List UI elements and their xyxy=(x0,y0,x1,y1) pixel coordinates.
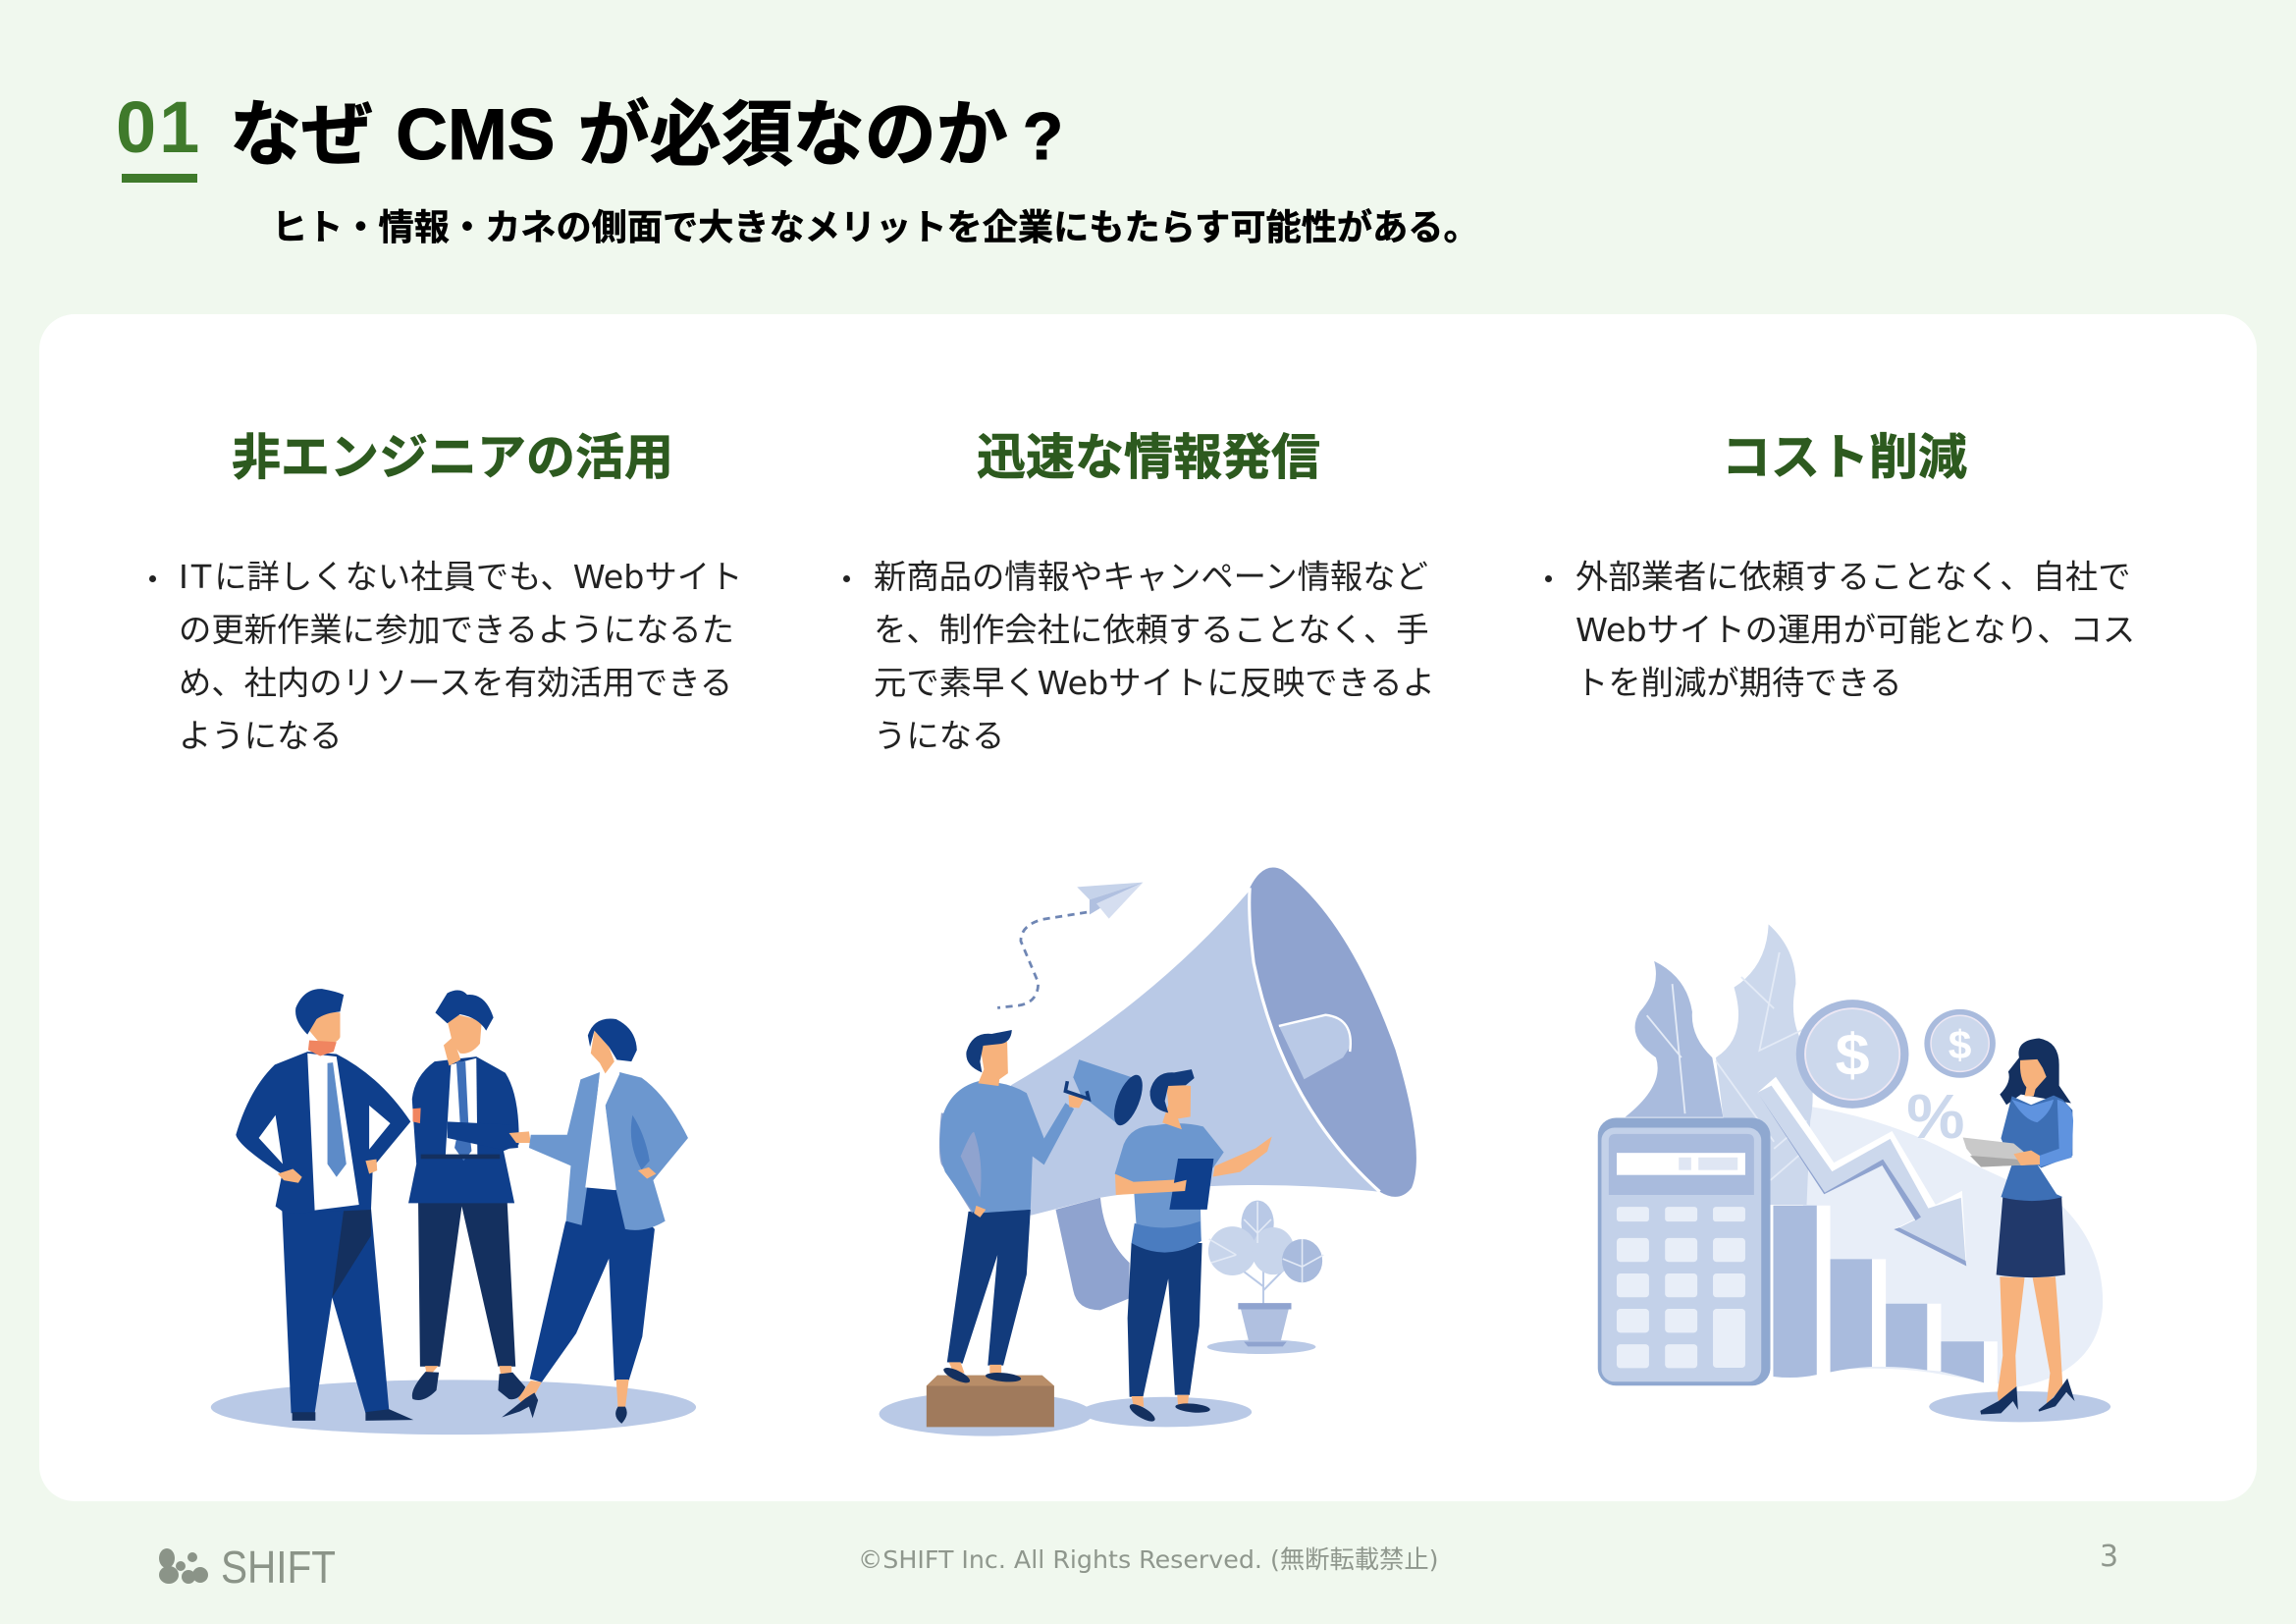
ground shadows xyxy=(880,1340,1315,1436)
text: column 3: Webサイトの運用が可能となり、コス xyxy=(1575,611,2135,649)
text: column 1: ようになる xyxy=(179,717,343,755)
paper plane xyxy=(1077,883,1143,919)
bullet 1 xyxy=(149,575,156,582)
title: なぜ CMS が必須なのか? xyxy=(230,95,1063,175)
panel: white card xyxy=(39,314,2257,1501)
logo wordmark: SHIFT xyxy=(221,1542,336,1593)
text: column 2: を、制作会社に依頼することなく、手 xyxy=(874,611,1429,649)
text: column 3: 外部業者に依頼することなく、自社で xyxy=(1575,558,2131,596)
falling arrow xyxy=(1758,1077,1966,1266)
giant megaphone xyxy=(1011,867,1416,1310)
small megaphone xyxy=(1065,1059,1148,1129)
percent sign: % xyxy=(1906,1081,1964,1152)
number underline xyxy=(122,174,197,183)
page number: 3 xyxy=(2100,1540,2118,1574)
footer copyright: ©SHIFT Inc. All Rights Reserved. (無断転載禁止) xyxy=(858,1545,1439,1574)
illustration: three business people xyxy=(211,989,696,1435)
footer logo xyxy=(159,1542,336,1593)
middle man xyxy=(408,991,525,1400)
subtitle: ヒト・情報・カネの側面で大きなメリットを企業にもたらす可能性がある。 xyxy=(272,207,1479,247)
text: column 2: 元で素早くWebサイトに反映できるよ xyxy=(874,664,1435,702)
heading: non-engineers: 非エンジニアの活用 xyxy=(232,430,673,485)
text: column 1 xyxy=(179,558,742,755)
text: column 3: トを削減が期待できる xyxy=(1575,664,1902,702)
heading: cost: コスト削減 xyxy=(1722,430,1967,485)
bullet 2 xyxy=(843,575,850,582)
potted plant xyxy=(1208,1201,1323,1346)
text: column 1: の更新作業に参加できるようになるた xyxy=(179,611,734,649)
dashed flight path xyxy=(997,912,1087,1007)
text: column 1: め、社内のリソースを有効活用できる xyxy=(179,664,732,702)
bullet 3 xyxy=(1545,575,1552,582)
white bar sides xyxy=(1817,1206,1998,1388)
text: column 3 xyxy=(1575,558,2135,702)
leaves xyxy=(1626,961,1723,1117)
calculator xyxy=(1598,1117,1771,1385)
right woman xyxy=(502,1019,688,1424)
coins: $ xyxy=(1836,1022,1870,1089)
coins: $ xyxy=(1949,1021,1971,1067)
declining bars xyxy=(1773,1206,1984,1382)
man with tablet xyxy=(1115,1069,1272,1425)
text: column 1: ITに詳しくない社員でも、Webサイト xyxy=(179,558,742,596)
woman with tablet xyxy=(1929,1038,2110,1422)
man on box xyxy=(927,1030,1085,1427)
heading: speed: 迅速な情報発信 xyxy=(977,430,1320,485)
logo mark xyxy=(159,1548,208,1584)
left man xyxy=(236,989,413,1421)
illustration: megaphone team xyxy=(880,867,1416,1436)
text: column 2 xyxy=(874,558,1435,755)
text: column 2: 新商品の情報やキャンペーン情報など xyxy=(874,558,1428,596)
text: column 2: うになる xyxy=(874,717,1004,755)
background blob xyxy=(1774,1107,2103,1387)
coins xyxy=(1796,1000,1996,1109)
section number: 01 xyxy=(116,86,202,168)
illustration: cost reduction xyxy=(1598,924,2110,1422)
